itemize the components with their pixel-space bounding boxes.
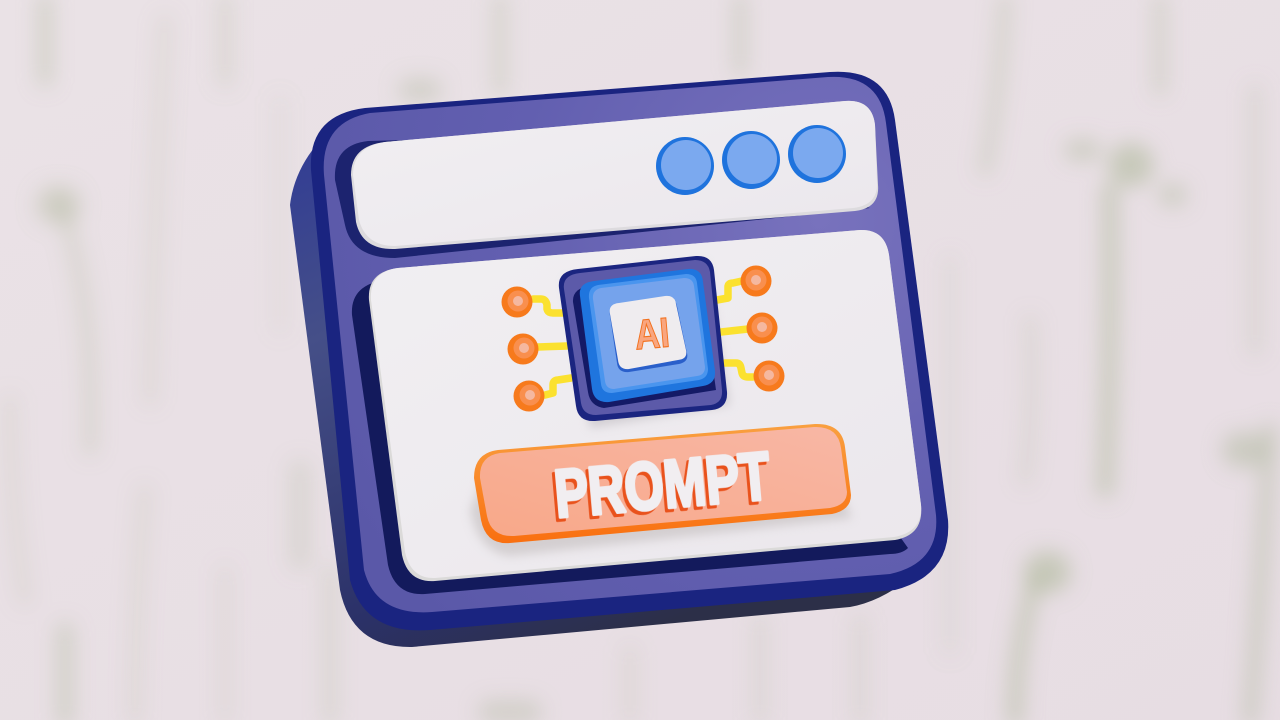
window front rim <box>311 72 948 630</box>
chip shadow under blue layer <box>573 275 716 408</box>
node left bottom <box>514 380 544 412</box>
node left top <box>502 286 532 318</box>
chip icon <box>502 256 784 428</box>
dot 2 <box>722 131 780 189</box>
chip base <box>559 256 727 421</box>
button shadow <box>470 436 852 556</box>
AI tile <box>610 298 687 372</box>
node left middle <box>508 334 538 364</box>
window: 3D purple frame <box>290 72 948 647</box>
button fill <box>480 427 847 536</box>
content panel shadow <box>352 255 908 594</box>
AI label: AI <box>633 309 672 358</box>
dot 1 <box>656 137 714 195</box>
circuit traces <box>533 281 753 395</box>
prompt button <box>470 424 852 556</box>
window control dots <box>656 125 846 195</box>
window side extrusion <box>290 118 930 647</box>
node right middle <box>746 312 778 344</box>
chip blue layer <box>580 269 715 402</box>
node right top <box>740 266 772 296</box>
node right bottom <box>754 360 784 392</box>
main content panel <box>352 230 921 594</box>
content panel <box>369 230 921 581</box>
title bar <box>335 101 878 258</box>
chip contact shadow <box>565 262 730 428</box>
button rim <box>474 424 851 543</box>
window purple face <box>324 77 936 612</box>
orange connector nodes <box>502 266 784 412</box>
prompt label: PROMPT <box>551 438 773 532</box>
title bar shadow <box>335 135 870 258</box>
title bar panel <box>351 101 878 249</box>
dot 3 <box>788 125 846 183</box>
